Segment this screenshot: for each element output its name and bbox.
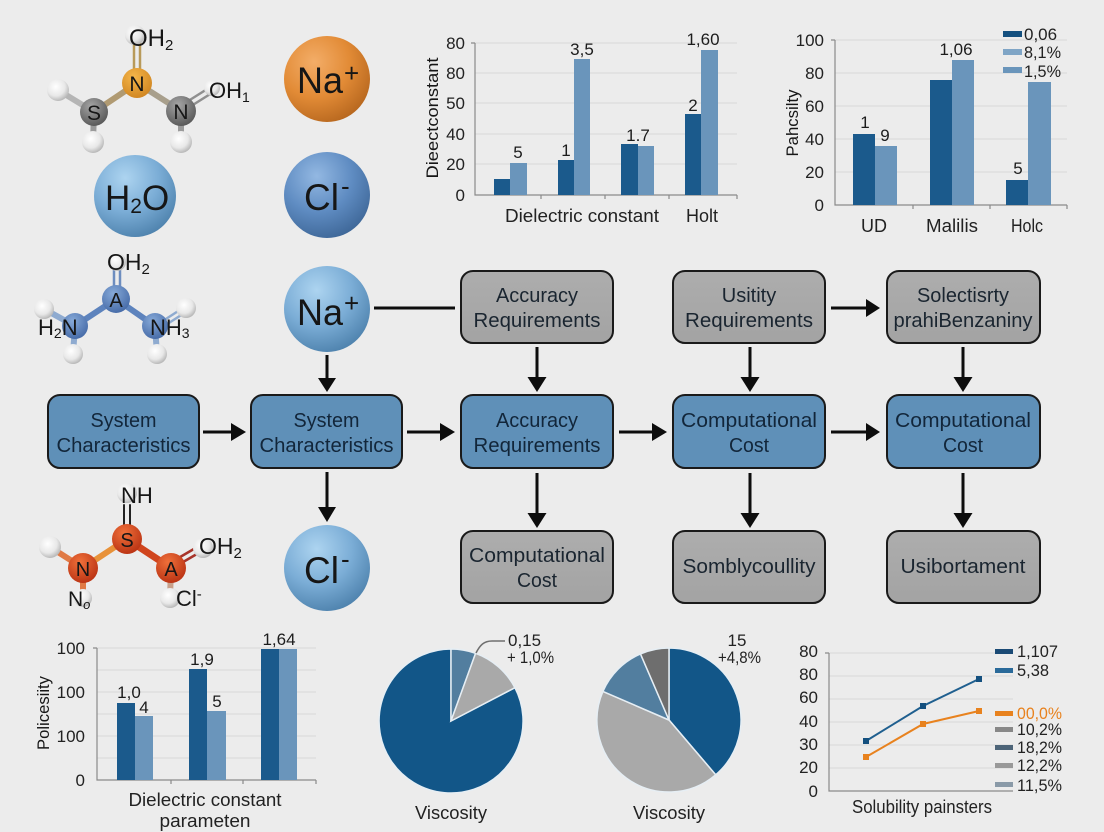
flow box: Usitity Requirements: Usitity bbox=[722, 285, 776, 307]
y axis labels: 80 bbox=[805, 64, 824, 83]
molecule: red-centred sulfur structure: NH bbox=[121, 483, 153, 508]
arrow: computational to somblycoullity bbox=[740, 473, 760, 528]
molecule: red-centred sulfur structure: o bbox=[83, 597, 90, 612]
pie chart: right viscosity: 15 bbox=[728, 631, 746, 650]
bar chart: bottom left: Dielectric constant bbox=[128, 790, 282, 810]
flow box: System Characteristics (left): System bbox=[90, 410, 156, 432]
bar value labels bbox=[117, 630, 296, 717]
y axis labels bbox=[57, 639, 85, 790]
arrow: computational to computational bbox=[831, 423, 880, 441]
bar value labels: 9 bbox=[880, 126, 890, 145]
pie chart: right viscosity: +4,8% bbox=[718, 648, 761, 667]
arrow: solectisrty to computational bbox=[954, 347, 972, 392]
legend: 10,2% bbox=[1017, 720, 1062, 739]
series: blue bbox=[863, 676, 982, 744]
y axis labels: 100 bbox=[57, 727, 85, 746]
molecule: blue-centred amine structure: OH bbox=[107, 249, 142, 275]
flow box: Somblycoullity: Somblycoullity bbox=[682, 556, 816, 578]
molecule: blue-centred amine structure: 3 bbox=[182, 325, 190, 341]
bar value labels bbox=[513, 30, 720, 162]
arrow: system down to Cl- bbox=[318, 472, 336, 522]
y axis labels: 80 bbox=[799, 665, 818, 684]
flow box: Accuracy Requirements (grey): Accuracy bbox=[496, 285, 578, 307]
arrow: second system to accuracy bbox=[407, 423, 455, 441]
y axis labels: 0 bbox=[456, 186, 465, 205]
molecule: orange-centred OH2 structure: N bbox=[173, 101, 189, 124]
bar chart: dielectric constant: Dielectric constant bbox=[505, 206, 659, 226]
molecule: red-centred sulfur structure: A bbox=[164, 559, 178, 581]
y axis labels: 60 bbox=[799, 688, 818, 707]
flow box: Computational Cost (grey): Computational bbox=[469, 545, 605, 567]
molecule: orange-centred OH2 structure: 1 bbox=[242, 89, 250, 105]
icon: H2O blue sphere: O bbox=[142, 179, 169, 218]
callout leader bbox=[476, 641, 505, 653]
y axis labels: 60 bbox=[805, 97, 824, 116]
bar value labels: 1,60 bbox=[686, 30, 720, 49]
icon: H2O blue sphere: H bbox=[105, 179, 130, 218]
arrow: accuracy to computational grey bbox=[528, 473, 546, 528]
bar chart: porosity with legend: Pahcsilty bbox=[783, 89, 802, 156]
icon: H2O blue sphere: 2 bbox=[130, 195, 142, 218]
pie chart: left viscosity: + 1,0% bbox=[507, 648, 554, 667]
molecule: red-centred sulfur structure: - bbox=[197, 586, 202, 603]
arrow: Na+ down bbox=[318, 355, 336, 392]
flow box: Accuracy Requirements (blue): Requirements bbox=[474, 435, 600, 457]
series: orange bbox=[863, 708, 982, 760]
flow box: Somblycoullity bbox=[673, 531, 825, 603]
flow box: System Characteristics (left): Characteristics bbox=[56, 435, 190, 457]
legend: 12,2% bbox=[1017, 756, 1062, 775]
molecule: orange-centred OH2 structure: 2 bbox=[165, 37, 173, 54]
bar value labels: 2 bbox=[688, 96, 698, 115]
pie chart: right viscosity: Viscosity bbox=[633, 803, 705, 823]
pie chart: left viscosity: Viscosity bbox=[415, 803, 487, 823]
bar chart: porosity with legend: Malilis bbox=[926, 216, 978, 236]
y axis labels: 0 bbox=[815, 196, 824, 215]
flow box: Computational Cost (blue, middle): Computational bbox=[681, 410, 817, 432]
flow box: Computational Cost (blue, right): Cost bbox=[943, 435, 983, 457]
bar value labels: 5 bbox=[212, 692, 222, 711]
arrow: usitity to solectisrty bbox=[831, 299, 880, 317]
molecule: red-centred sulfur structure bbox=[39, 483, 242, 612]
flow box: Usitity Requirements: Requirements bbox=[685, 310, 813, 332]
legend: 5,38 bbox=[1017, 661, 1049, 680]
bar value labels: 1 bbox=[860, 113, 870, 132]
line chart: solubility: Solubility painsters bbox=[852, 797, 992, 817]
molecule: red-centred sulfur structure: Cl bbox=[176, 586, 197, 611]
y axis labels: 100 bbox=[57, 683, 85, 702]
arrow: left system to second system bbox=[203, 423, 246, 441]
bar value labels: 5 bbox=[513, 143, 523, 162]
bar chart: dielectric constant bbox=[423, 30, 737, 226]
flow box: Solectisrty prahiBenzaniny: prahiBenzaniny bbox=[894, 310, 1032, 332]
pie chart: left viscosity bbox=[379, 631, 554, 823]
legend bbox=[995, 642, 1062, 795]
y axis labels: 20 bbox=[799, 758, 818, 777]
icon: H2O blue sphere bbox=[94, 155, 176, 237]
bar value labels: 5 bbox=[1013, 159, 1023, 178]
molecule: red-centred sulfur structure: OH bbox=[199, 533, 234, 559]
connector: Na+ to accuracy bbox=[374, 306, 455, 310]
bar value labels bbox=[860, 40, 1023, 178]
icon: Na+ orange sphere bbox=[284, 36, 370, 122]
bar chart: porosity with legend: UD bbox=[861, 216, 887, 236]
arrow: accuracy grey to blue bbox=[528, 347, 546, 392]
bar value labels: 1,0 bbox=[117, 683, 141, 702]
y axis labels bbox=[796, 31, 824, 215]
y axis labels bbox=[799, 642, 818, 801]
icon: Na+ blue sphere bbox=[284, 266, 370, 352]
molecule: red-centred sulfur structure: S bbox=[120, 530, 134, 552]
icon: Na+ orange sphere: + bbox=[344, 58, 359, 88]
icon: Cl- blue sphere lower bbox=[284, 525, 370, 611]
y axis labels: 80 bbox=[446, 64, 465, 83]
flow box: Accuracy Requirements (blue): Accuracy bbox=[496, 410, 578, 432]
y axis labels: 0 bbox=[809, 782, 818, 801]
bar value labels: 1 bbox=[561, 141, 571, 160]
bar chart: bottom left bbox=[34, 630, 316, 831]
line chart: solubility bbox=[799, 642, 1062, 817]
flow box: Computational Cost (grey): Cost bbox=[517, 570, 557, 592]
y axis labels: 0 bbox=[76, 771, 85, 790]
flow box: Usibortament bbox=[887, 531, 1040, 603]
molecule: orange-centred OH2 structure: OH bbox=[209, 78, 242, 103]
flow box: Accuracy Requirements (grey): Requirements bbox=[474, 310, 600, 332]
molecule: orange-centred OH2 structure: S bbox=[87, 102, 101, 125]
y axis labels: 40 bbox=[805, 130, 824, 149]
bar value labels: 1,9 bbox=[190, 650, 214, 669]
arrow: accuracy to computational bbox=[619, 423, 667, 441]
molecule: blue-centred amine structure: N bbox=[62, 315, 78, 340]
bar chart: porosity with legend: Holc bbox=[1011, 216, 1043, 236]
icon: Na+ blue sphere: Na bbox=[297, 292, 343, 333]
flow box: Computational Cost (grey) bbox=[461, 531, 613, 603]
flow box: System Characteristics (second): Characteristics bbox=[260, 435, 394, 457]
flow box: Solectisrty prahiBenzaniny bbox=[887, 271, 1040, 343]
bar value labels: 1,64 bbox=[262, 630, 296, 649]
flow box: Usitity Requirements bbox=[673, 271, 825, 343]
icon: Cl- blue sphere lower: Cl bbox=[304, 550, 339, 591]
legend bbox=[1003, 25, 1061, 81]
icon: Cl- blue sphere bbox=[284, 152, 370, 238]
legend: 00,0% bbox=[1017, 704, 1062, 723]
pie chart: left viscosity: 0,15 bbox=[508, 631, 541, 650]
y axis labels: 100 bbox=[796, 31, 824, 50]
arrow: usitity to computational bbox=[740, 347, 760, 392]
icon: Na+ orange sphere: Na bbox=[297, 60, 343, 101]
y axis labels bbox=[446, 34, 465, 205]
flow box: Computational Cost (blue, middle) bbox=[673, 395, 825, 468]
flow box: System Characteristics (left) bbox=[48, 395, 199, 468]
y axis labels: 40 bbox=[799, 712, 818, 731]
legend: 8,1% bbox=[1024, 43, 1061, 62]
y axis labels: 100 bbox=[57, 639, 85, 658]
molecule: blue-centred amine structure: NH bbox=[150, 315, 182, 340]
flow box: Computational Cost (blue, right): Computational bbox=[895, 410, 1031, 432]
molecule: blue-centred amine structure: 2 bbox=[54, 325, 62, 341]
flow box: System Characteristics (second): System bbox=[294, 410, 360, 432]
y axis labels: 20 bbox=[805, 163, 824, 182]
molecule: blue-centred amine structure: H bbox=[38, 315, 54, 340]
legend: 1,5% bbox=[1024, 62, 1061, 81]
icon: Na+ blue sphere: + bbox=[344, 288, 359, 318]
y axis labels: 80 bbox=[446, 34, 465, 53]
y axis labels: 80 bbox=[799, 642, 818, 661]
flow box: Computational Cost (blue, middle): Cost bbox=[729, 435, 769, 457]
flow box: Accuracy Requirements (blue) bbox=[461, 395, 613, 468]
bar value labels: 1.7 bbox=[626, 126, 650, 145]
y axis labels: 40 bbox=[446, 125, 465, 144]
legend: 0,06 bbox=[1024, 25, 1057, 44]
molecule: blue-centred amine structure bbox=[34, 249, 196, 364]
arrows: flowchart connectors bbox=[203, 299, 972, 528]
molecule: red-centred sulfur structure: 2 bbox=[234, 545, 242, 562]
y axis labels: 20 bbox=[446, 155, 465, 174]
bars group 3 bbox=[117, 649, 297, 780]
flow box: System Characteristics (second) bbox=[251, 395, 402, 468]
bars group 2 bbox=[853, 60, 1051, 205]
flow box: Solectisrty prahiBenzaniny: Solectisrty bbox=[917, 285, 1009, 307]
bar value labels: 4 bbox=[139, 698, 149, 717]
icon: Cl- blue sphere: - bbox=[341, 171, 350, 201]
bar chart: porosity with legend bbox=[783, 25, 1067, 236]
bar chart: dielectric constant: Holt bbox=[686, 206, 718, 226]
icon: Cl- blue sphere lower: - bbox=[341, 544, 350, 574]
flow box: Usibortament: Usibortament bbox=[900, 556, 1026, 578]
molecule: blue-centred amine structure: A bbox=[109, 290, 123, 312]
bar chart: bottom left: Policesiity bbox=[34, 676, 53, 750]
bar chart: bottom left: parameten bbox=[160, 811, 250, 831]
y axis labels: 50 bbox=[446, 94, 465, 113]
bar value labels: 3,5 bbox=[570, 40, 594, 59]
icon: Cl- blue sphere: Cl bbox=[304, 177, 339, 218]
flow box: Accuracy Requirements (grey) bbox=[461, 271, 613, 343]
arrow: computational to usibortament bbox=[954, 473, 972, 528]
flow box: Computational Cost (blue, right) bbox=[887, 395, 1040, 468]
y axis labels: 30 bbox=[799, 735, 818, 754]
legend: 11,5% bbox=[1017, 776, 1062, 795]
molecule: orange-centred OH2 structure bbox=[47, 25, 250, 153]
bars group 1 bbox=[494, 50, 718, 195]
legend: 18,2% bbox=[1017, 738, 1062, 757]
bar value labels: 1,06 bbox=[939, 40, 973, 59]
pie chart: right viscosity bbox=[597, 631, 761, 823]
molecule: red-centred sulfur structure: N bbox=[76, 559, 90, 581]
molecule: red-centred sulfur structure: N bbox=[68, 588, 83, 611]
molecule: orange-centred OH2 structure: N bbox=[129, 73, 145, 96]
molecule: orange-centred OH2 structure: OH bbox=[129, 25, 165, 52]
molecule: blue-centred amine structure: 2 bbox=[142, 261, 150, 278]
legend: 1,107 bbox=[1017, 642, 1058, 661]
bar chart: dielectric constant: Dieectconstant bbox=[423, 57, 442, 178]
